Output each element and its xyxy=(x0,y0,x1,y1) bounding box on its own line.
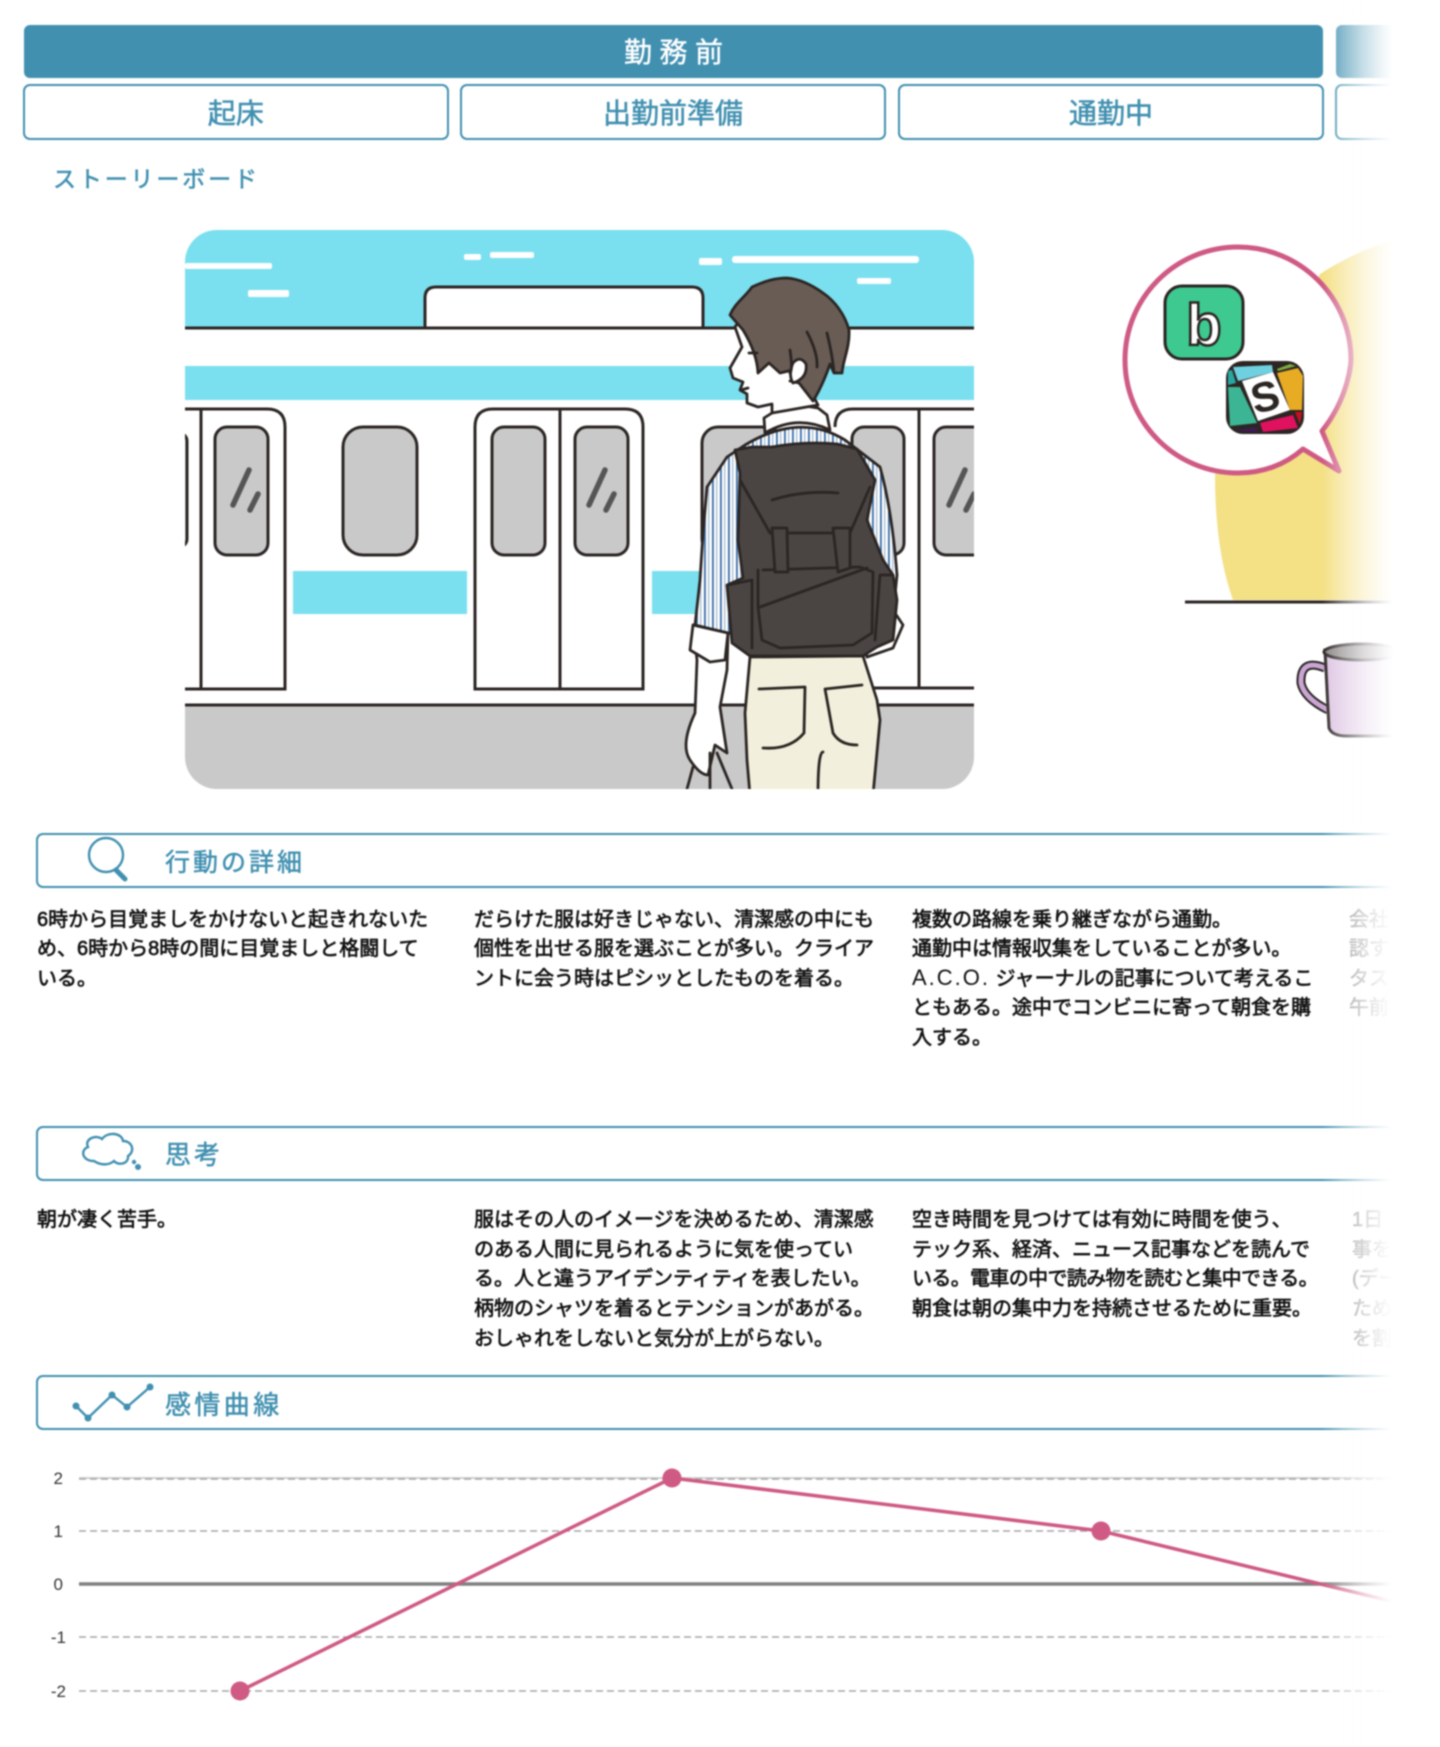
speech bubble xyxy=(1125,247,1351,473)
column text: 思考 通勤中: テック系、経済、ニュース記事などを読んで xyxy=(912,1239,1310,1261)
step tab: 通勤中: 通勤中 xyxy=(1069,98,1153,129)
column text: 思考 通勤中: 空き時間を見つけては有効に時間を使う、 xyxy=(912,1209,1292,1231)
column text: 行動の詳細 出勤前準備 xyxy=(473,908,874,990)
phase bar: 勤務前 xyxy=(24,24,1323,78)
icon: b app: b xyxy=(1186,293,1222,358)
column text: 思考 faded column: ため xyxy=(1352,1298,1392,1320)
column text: 行動の詳細 faded column: 認す xyxy=(1349,938,1389,960)
person xyxy=(686,278,903,795)
column text: 行動の詳細 faded column: タス xyxy=(1349,968,1389,990)
column text: 行動の詳細 通勤中: ともある。途中でコンビニに寄って朝食を購 xyxy=(912,997,1311,1019)
column text: 行動の詳細 faded column xyxy=(1349,908,1389,1019)
section header: 思考: 思考 xyxy=(165,1140,223,1170)
column text: 行動の詳細 通勤中: 複数の路線を乗り継ぎながら通勤。 xyxy=(912,909,1232,931)
section header: 感情曲線: 感情曲線 xyxy=(165,1390,283,1420)
step tab: 出勤前準備 xyxy=(460,84,886,140)
column text: 思考 出勤前準備: 柄物のシャツを着るとテンションがあがる。 xyxy=(474,1298,874,1320)
column text: 思考 faded column: 事を xyxy=(1352,1239,1392,1261)
column text: 思考 出勤前準備: 服はその人のイメージを決めるため、清潔感 xyxy=(474,1209,874,1231)
emotion curve chart: -2 xyxy=(51,1682,66,1701)
emotion curve chart: 1 xyxy=(54,1522,63,1541)
icon: b app xyxy=(1165,286,1243,359)
icon: s app: S xyxy=(1246,370,1284,423)
section header: 感情曲線 xyxy=(36,1375,1436,1430)
step tab: 起床 xyxy=(22,84,449,140)
column text: 思考 通勤中: 朝食は朝の集中力を持続させるために重要。 xyxy=(912,1298,1312,1320)
icon: s app xyxy=(1226,361,1304,434)
section header: 行動の詳細 xyxy=(36,832,1436,888)
column text: 行動の詳細 通勤中: A.C.O. ジャーナルの記事について考えるこ xyxy=(912,965,1313,990)
illustration: speech bubble with app icons, desk and mug xyxy=(1122,244,1388,738)
column text: 思考 通勤中 xyxy=(912,1208,1318,1320)
column text: 思考 faded column: (デー xyxy=(1352,1268,1399,1290)
step tab: next step (faded) xyxy=(1335,84,1435,140)
section header: 行動の詳細: 行動の詳細 xyxy=(165,848,305,876)
icon: mug xyxy=(1301,644,1400,736)
column text: 行動の詳細 通勤中: 通勤中は情報収集をしていることが多い。 xyxy=(912,938,1291,960)
step tab: 出勤前準備: 出勤前準備 xyxy=(603,98,743,129)
emotion curve chart: 0 xyxy=(54,1575,63,1594)
column text: 行動の詳細 出勤前準備: ントに会う時はピシッとしたものを着る。 xyxy=(474,968,854,990)
column text: 行動の詳細 出勤前準備: 個性を出せる服を選ぶことが多い。クライア xyxy=(474,938,874,960)
step tab: 通勤中 xyxy=(898,84,1324,140)
storyboard illustration: commuter on a train platform xyxy=(184,229,975,790)
column text: 思考 出勤前準備: のある人間に見られるように気を使ってい xyxy=(474,1239,853,1261)
column text: 行動の詳細 起床: 6時から目覚ましをかけないと起きれないた xyxy=(37,909,428,931)
column text: 思考 出勤前準備 xyxy=(474,1208,874,1350)
step tab: 起床: 起床 xyxy=(208,98,264,129)
icon: thought cloud xyxy=(81,1132,142,1171)
column text: 行動の詳細 通勤中: 入する。 xyxy=(912,1027,992,1049)
column text: 思考 faded column: を割 xyxy=(1352,1328,1392,1350)
column text: 行動の詳細 起床 xyxy=(36,908,428,990)
column text: 行動の詳細 起床: いる。 xyxy=(37,968,97,990)
column text: 思考 faded column: 1日 xyxy=(1352,1209,1383,1231)
icon: magnifier xyxy=(86,836,128,882)
heading: storyboard: ストーリーボード xyxy=(53,166,260,192)
column text: 行動の詳細 通勤中 xyxy=(911,908,1313,1049)
phase bar: 勤務前: 勤務前 xyxy=(624,36,730,68)
column text: 思考 通勤中: いる。電車の中で読み物を読むと集中できる。 xyxy=(912,1268,1318,1290)
column text: 行動の詳細 起床: め、6時から8時の間に目覚ましと格闘して xyxy=(37,938,419,960)
right edge fade overlay xyxy=(1322,0,1440,1747)
column text: 行動の詳細 faded column: 午前 xyxy=(1349,997,1389,1019)
column text: 行動の詳細 出勤前準備: だらけた服は好きじゃない、清潔感の中にも xyxy=(474,909,874,931)
emotion curve chart: 2 xyxy=(54,1469,63,1488)
column text: 行動の詳細 faded column: 会社 xyxy=(1349,909,1389,931)
phase bar: next phase (faded) xyxy=(1336,24,1436,78)
column text: 思考 出勤前準備: おしゃれをしないと気分が上がらない。 xyxy=(474,1328,834,1350)
wall shape xyxy=(1215,235,1440,600)
column text: 思考 faded column xyxy=(1352,1209,1399,1350)
section header: 思考 xyxy=(36,1126,1436,1180)
emotion curve chart: -1 xyxy=(51,1628,66,1647)
column text: 思考 起床: 朝が凄く苦手。 xyxy=(37,1209,177,1231)
column text: 思考 出勤前準備: る。人と違うアイデンティティを表したい。 xyxy=(474,1268,871,1290)
